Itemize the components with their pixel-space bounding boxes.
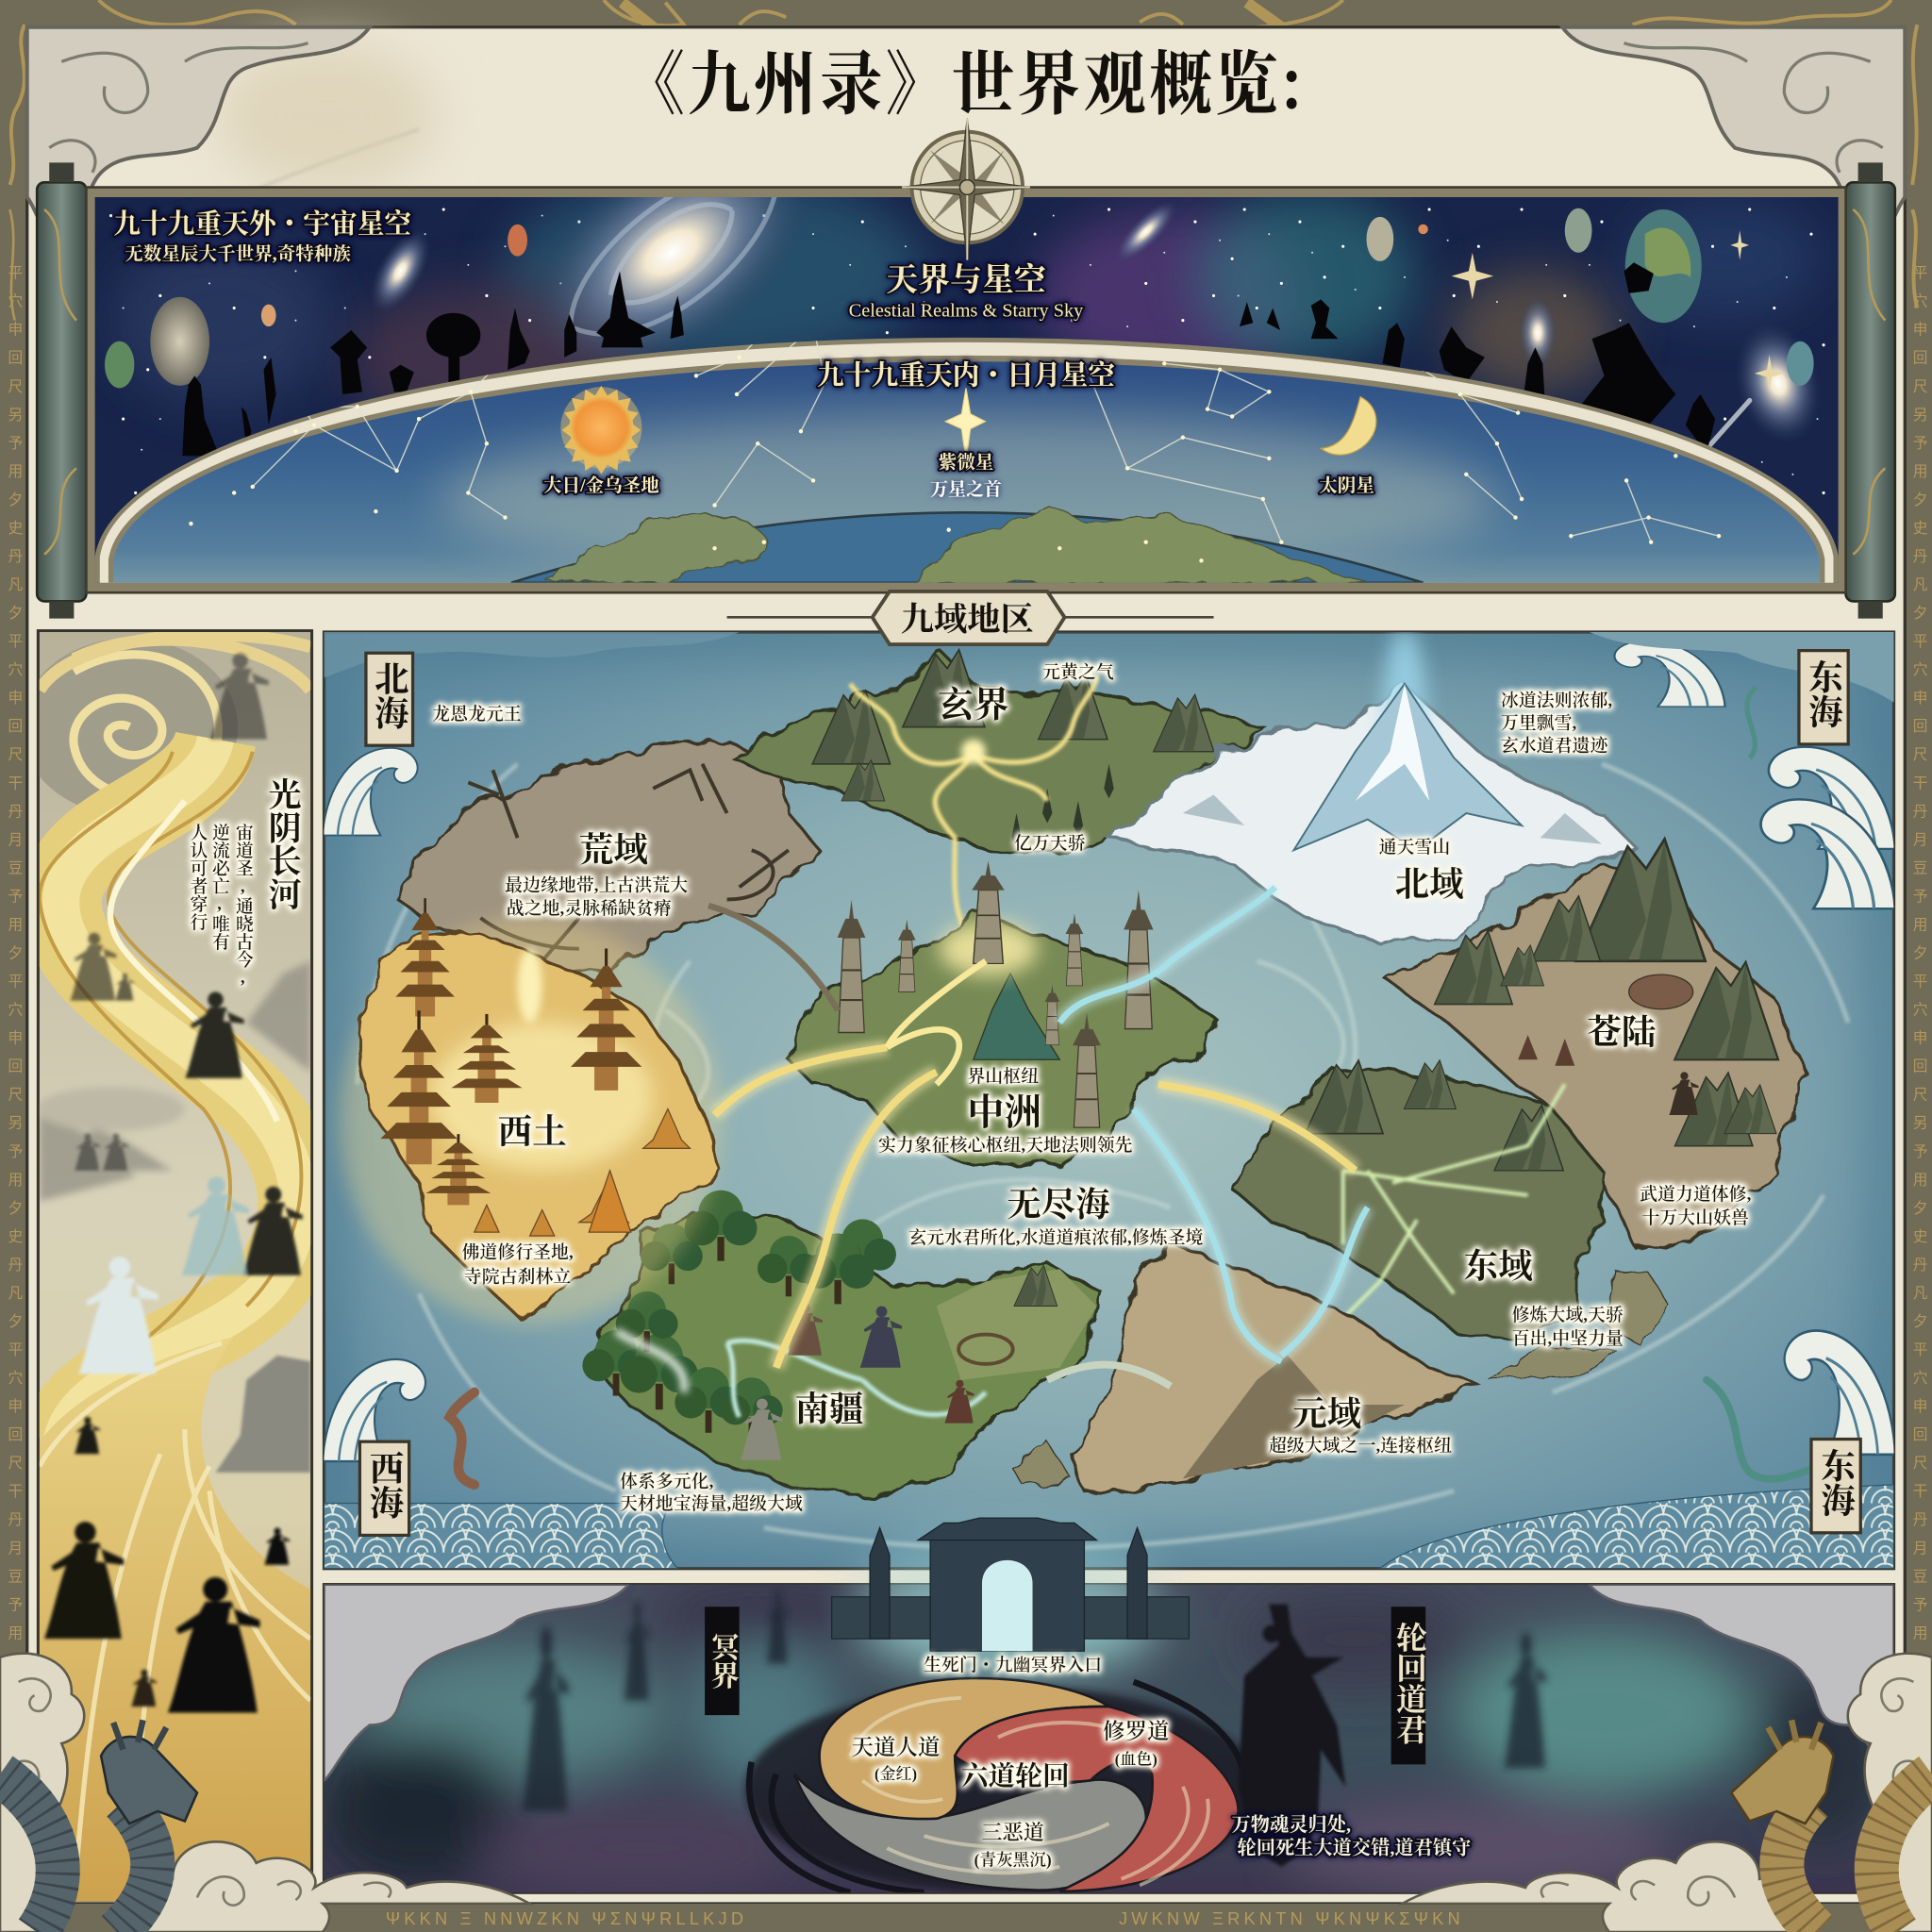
ziwei sublabel: 万星之首	[930, 479, 1002, 500]
icon: blue dragon	[0, 1720, 197, 1932]
six paths swirl	[745, 1678, 1263, 1892]
top-right corner cloud	[1562, 27, 1905, 246]
sea label: north: 北海	[370, 660, 409, 729]
label: grey path: 三恶道	[981, 1821, 1044, 1844]
outer starry sky	[94, 197, 1839, 583]
dongyu note: 百出,中坚力量	[1512, 1328, 1624, 1349]
planet earthlike	[1625, 209, 1702, 323]
island: Beiyu	[1109, 628, 1639, 942]
ocean currents	[358, 764, 1848, 1549]
xitu note: 佛道修行圣地,	[461, 1243, 574, 1263]
island: Yuanyu	[1010, 1244, 1670, 1491]
island: Xitu	[339, 898, 721, 1324]
sea label: east top: 东海	[1805, 659, 1843, 728]
crescent moon	[1321, 397, 1376, 455]
panel: river of time	[21, 631, 311, 1901]
label: red path: 修罗道	[1103, 1720, 1169, 1744]
gate of life and death	[832, 1518, 1189, 1651]
planet horizon	[438, 413, 1497, 585]
sea serpents	[450, 1392, 475, 1485]
beiyu note: 玄水道君遗迹	[1501, 736, 1608, 757]
corner cloud left	[325, 1585, 628, 1780]
scroll roller left	[37, 162, 86, 619]
sea label: east bottom: 东海	[1817, 1448, 1856, 1517]
reincarnation lord figure	[1239, 1605, 1345, 1867]
label: xitu: 西土	[498, 1112, 567, 1151]
scroll roller right	[1846, 162, 1895, 619]
underworld note: 万物魂灵归处,	[1232, 1814, 1351, 1836]
canglu note: 十万大山妖兽	[1641, 1208, 1749, 1228]
underworld title strip	[705, 1607, 740, 1715]
river delta	[40, 1337, 310, 1901]
corner waves	[323, 632, 1895, 1569]
sea label: east top	[1799, 651, 1848, 744]
label: gold path: 天道人道	[852, 1736, 941, 1760]
river streaks	[40, 1343, 310, 1897]
reincarnation lord strip: 轮回道君	[1391, 1622, 1426, 1745]
scroll frame	[86, 188, 1846, 592]
label: xuanjie: 玄界	[938, 686, 1009, 725]
underworld note: 轮回死生大道交错,道君镇守	[1237, 1838, 1471, 1859]
ink landscapes	[37, 961, 310, 1201]
underworld title strip: 冥界	[707, 1633, 740, 1690]
bottom band: ΨKKN Ξ NNWZKN ΨΣNΨRLLKJD	[386, 1908, 747, 1928]
icon: gold dragon	[1731, 1720, 1932, 1932]
label: endless sea: 无尽海	[1007, 1185, 1110, 1224]
section heading: nine regions	[727, 591, 1214, 644]
gold corner and edge ornaments	[9, 0, 1917, 321]
bottom left clouds	[0, 1654, 530, 1932]
north sea note: 龙恩龙元王	[432, 704, 522, 724]
snow mountain note: 通天雪山	[1379, 837, 1450, 858]
planet land	[1645, 228, 1690, 277]
river description: 宙道圣,通晓古今,	[233, 823, 253, 988]
celestial title: 天界与星空	[886, 262, 1046, 298]
spiral galaxy large	[555, 197, 791, 355]
label: six paths center: 六道轮回	[961, 1762, 1070, 1792]
nanjiang note: 体系多元化,	[620, 1472, 713, 1491]
huangyu note: 战之地,灵脉稀缺贫瘠	[507, 897, 672, 919]
swirl: red path	[955, 1707, 1239, 1891]
yuanyu note: 超级大域之一,连接枢纽	[1269, 1435, 1452, 1457]
ziwei star label: 紫微星	[939, 451, 993, 473]
sun label: 大日/金乌圣地	[543, 475, 659, 496]
planet pale	[1366, 217, 1393, 261]
sun	[560, 386, 641, 475]
river title: 光阴长河	[264, 777, 301, 910]
map labels	[432, 661, 1752, 1514]
label: grey path: (青灰黑沉)	[974, 1850, 1052, 1869]
xitu note: 寺院古刹林立	[464, 1267, 571, 1288]
zhongzhou note top: 界山枢纽	[967, 1066, 1039, 1087]
constellations	[253, 318, 1719, 542]
river description	[187, 823, 253, 988]
ghost figures	[523, 1590, 1546, 1811]
label: beiyu: 北域	[1395, 865, 1464, 904]
planet pale small	[1565, 208, 1592, 253]
nebula glow right	[1521, 301, 1555, 362]
section heading: nine regions: 九域地区	[901, 602, 1034, 639]
silhouettes left	[182, 271, 684, 456]
orange stars	[261, 225, 1428, 326]
bottom right clouds	[1402, 1654, 1932, 1932]
mist clouds	[321, 1577, 1885, 1897]
top-left corner cloud	[27, 27, 370, 246]
label: canglu: 苍陆	[1587, 1012, 1656, 1051]
sea label: north	[366, 653, 413, 745]
label: dongyu: 东域	[1464, 1246, 1533, 1285]
moon label: 太阴星	[1319, 475, 1374, 496]
swirl: grey path	[794, 1774, 1146, 1890]
label: huangyu: 荒域	[579, 830, 648, 869]
outer sky subtitle: 无数星辰大千世界,奇特种族	[125, 244, 351, 265]
right spiral galaxy	[1740, 331, 1816, 436]
dongyu note: 修炼大域,天骄	[1512, 1306, 1624, 1325]
island: Xuanjie	[733, 650, 1263, 955]
golden river	[40, 740, 301, 1441]
far galaxy	[1120, 205, 1173, 258]
canglu note: 武道力道体修,	[1640, 1185, 1751, 1205]
title: 《九州录》世界观概览:	[622, 29, 1306, 129]
bottom band: JWKNW ΞRKNTN ΨKNΨKΣΨKN	[1119, 1908, 1464, 1928]
corner cloud right	[1590, 1585, 1894, 1780]
sea label: west	[359, 1441, 409, 1535]
comet	[1700, 400, 1750, 456]
sparkles	[1452, 230, 1784, 391]
river description: 人认可者穿行	[187, 823, 208, 931]
swirl: gold path	[820, 1678, 1109, 1819]
panel: nine regions map	[323, 628, 1895, 1569]
island: Nanjiang	[582, 1191, 1103, 1497]
xuanjie note: 亿万天骄	[1014, 833, 1086, 854]
label: yuanyu: 元域	[1292, 1394, 1362, 1433]
small galaxy	[374, 234, 426, 308]
label: zhongzhou: 中洲	[967, 1092, 1041, 1133]
sky text	[113, 208, 1374, 500]
gate label: 生死门・九幽冥界入口	[924, 1655, 1102, 1675]
island: Zhongzhou	[789, 861, 1220, 1164]
planet green	[105, 341, 134, 388]
zhongzhou note: 实力象征核心枢纽,天地法则领先	[878, 1135, 1133, 1156]
inner sky	[113, 361, 1820, 583]
right rune column: 平穴申回尺另予用夕史丹凡夕平穴申回尺干丹月豆予用夕平穴申回尺另予用夕史丹凡夕平穴申回尺干丹月豆予用夕平穴申回尺另予	[1910, 265, 1927, 1880]
purple star	[945, 388, 985, 459]
sea label: west: 西海	[365, 1450, 404, 1519]
endless sea note: 玄元水君所化,水道道痕浓郁,修炼圣境	[908, 1227, 1204, 1248]
beiyu note: 冰道法则浓郁,	[1501, 691, 1612, 710]
cliff ruins	[216, 1356, 310, 1473]
panel: celestial scroll	[36, 162, 1896, 619]
island: Dongyu	[1232, 1060, 1602, 1343]
time spiral	[21, 635, 310, 816]
silhouettes right	[1240, 262, 1715, 454]
huangyu note: 最边缘地带,上古洪荒大	[505, 875, 688, 895]
planet left	[150, 297, 209, 386]
label: gold path: (金红)	[874, 1765, 917, 1783]
inner sky content	[191, 318, 1719, 585]
constellation stars	[191, 318, 1719, 560]
celestial english: Celestial Realms & Starry Sky	[849, 301, 1084, 322]
label: nanjiang: 南疆	[794, 1390, 864, 1428]
outer sky title: 九十九重天外・宇宙星空	[113, 208, 411, 240]
inner sky title: 九十九重天内・日月星空	[817, 360, 1115, 391]
bottom band	[0, 1904, 1932, 1932]
energy rivers	[708, 887, 1368, 1386]
icon: compass	[902, 118, 1030, 260]
nanjiang note: 天材地宝海量,超级大域	[620, 1492, 803, 1514]
planet blue	[1787, 341, 1814, 386]
beiyu note: 万里飘雪,	[1501, 713, 1577, 734]
sea label: east bottom	[1811, 1440, 1860, 1533]
island: Huangyu	[398, 740, 820, 974]
island: Canglu	[1386, 839, 1805, 1251]
xuanjie note top: 元黄之气	[1042, 661, 1114, 682]
figures	[44, 653, 303, 1713]
panel: underworld	[321, 1577, 1894, 1897]
left rune column: 平穴申回尺另予用夕史丹凡夕平穴申回尺干丹月豆予用夕平穴申回尺另予用夕史丹凡夕平穴申回尺干丹月豆予用夕平穴申回尺另予	[6, 265, 23, 1880]
label: red path: (血色)	[1115, 1750, 1158, 1768]
dome arch	[95, 338, 1839, 583]
river description: 逆流必亡,唯有	[209, 823, 229, 950]
